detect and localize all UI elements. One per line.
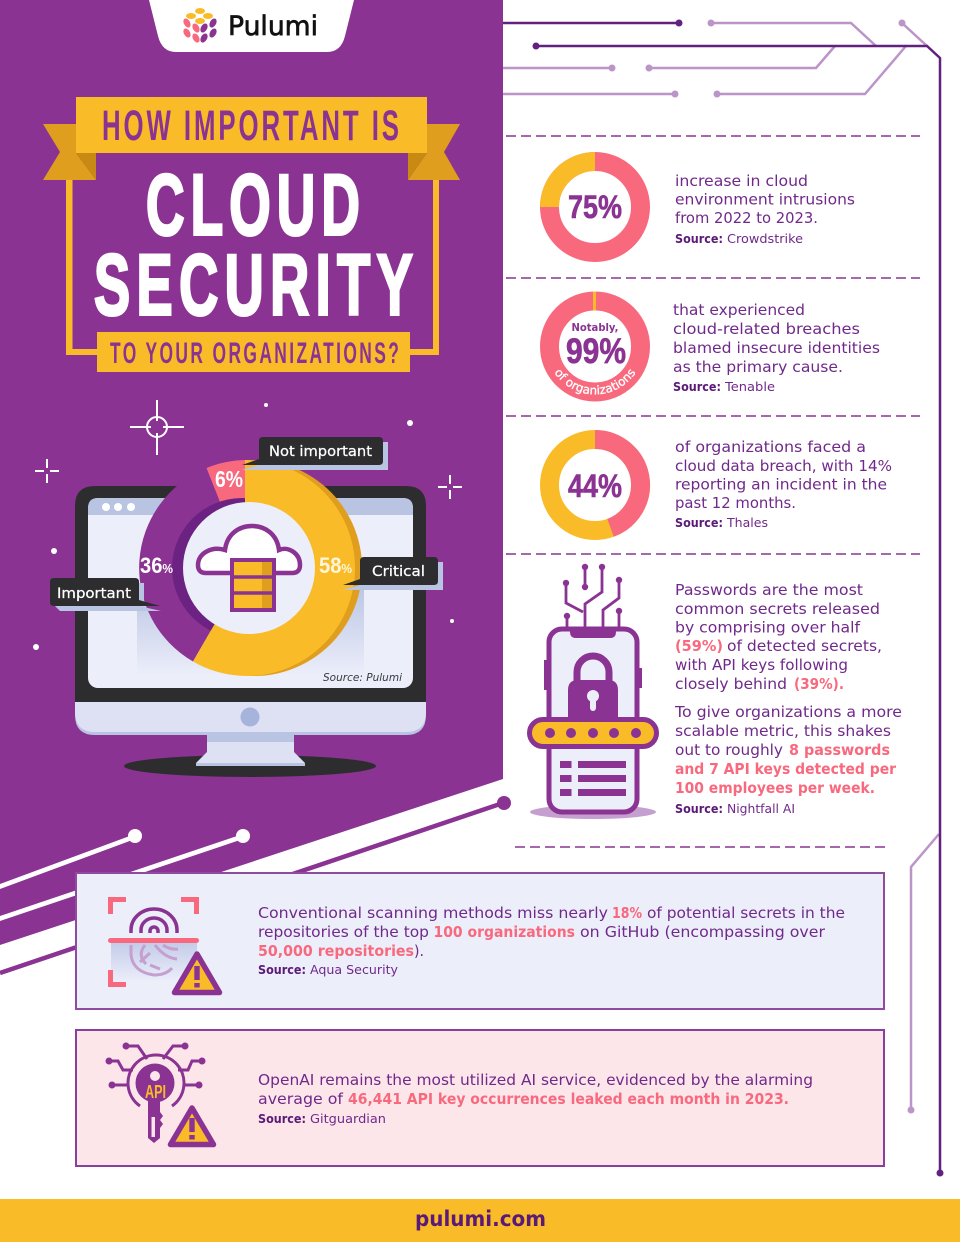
stat text: insecure identities: blamed insecure identities xyxy=(673,339,880,357)
logo: Pulumi xyxy=(228,11,318,42)
stat text: insecure identities: Source: xyxy=(673,379,721,394)
text: OpenAI API keys: 46,441 API key occurrences leaked each month in 2023. xyxy=(348,1090,789,1108)
stat text: passwords and API keys: 100 employees per week. xyxy=(675,779,875,797)
text: scanning methods: on GitHub (encompassing over xyxy=(580,923,826,941)
decorative sparkles and crosshair xyxy=(33,400,462,650)
callout: Critical xyxy=(343,557,443,590)
panel: purple title background xyxy=(0,0,503,945)
stat text: passwords and API keys: closely behind xyxy=(675,675,787,693)
callout: Important xyxy=(50,578,161,611)
stat: 99% donut: Notably, xyxy=(572,321,618,334)
stat text: passwords and API keys: 8 passwords xyxy=(789,741,890,759)
stat text: data breach: of organizations faced a xyxy=(675,438,866,456)
text: scanning methods: 18% xyxy=(612,904,642,922)
monitor illustration xyxy=(75,486,426,777)
title banner xyxy=(43,97,460,372)
icon: phone with padlock and circuits xyxy=(530,564,656,819)
text: scanning methods: repositories of the top xyxy=(258,923,429,941)
stat text: passwords and API keys: (39%). xyxy=(794,675,844,693)
text: OpenAI API keys: average of xyxy=(258,1090,344,1108)
stat text: cloud intrusions: increase in cloud xyxy=(675,172,808,190)
icon: API key with warning: API xyxy=(145,1082,166,1102)
stat text: insecure identities: that experienced xyxy=(673,301,805,319)
stat: 44% donut: 44% xyxy=(568,468,622,504)
text: scanning methods: 100 organizations xyxy=(434,923,575,941)
text: OpenAI API keys: Gitguardian xyxy=(310,1111,386,1126)
callout: Critical: Critical xyxy=(372,564,425,580)
monitor illustration: Source: Pulumi xyxy=(323,671,402,684)
stat: 99% donut: of organizations xyxy=(555,369,636,395)
text: OpenAI API keys: OpenAI remains the most utilized AI service, evidenced by the alarming xyxy=(258,1071,813,1089)
section dividers xyxy=(506,136,920,847)
stat text: passwords and API keys: To give organizations a more xyxy=(674,703,902,721)
callout: Not important xyxy=(242,437,388,470)
donut chart: importance of cloud security xyxy=(50,437,443,676)
stat text: data breach xyxy=(675,438,892,530)
icon: cloud with server xyxy=(198,526,300,610)
stat text: data breach: Source: xyxy=(675,515,723,530)
text: OpenAI API keys: Source: xyxy=(258,1111,306,1126)
stat text: passwords and API keys: with API keys following xyxy=(675,656,848,674)
stat text: passwords and API keys: by comprising over half xyxy=(675,618,861,636)
stat: 75% donut xyxy=(550,162,640,252)
stat text: passwords and API keys: out to roughly xyxy=(675,741,783,759)
circuit lines: lower left xyxy=(0,796,511,973)
stat text: cloud intrusions: Crowdstrike xyxy=(727,231,803,246)
logo xyxy=(149,0,354,52)
callout: Not important: Not important xyxy=(269,444,373,460)
title banner: HOW IMPORTANT IS xyxy=(102,101,399,150)
stat text: passwords and API keys: and 7 API keys detected per xyxy=(675,760,897,778)
stat text: cloud intrusions: environment intrusions xyxy=(675,190,855,208)
stat text: data breach: reporting an incident in the xyxy=(675,476,887,494)
stat text: passwords and API keys xyxy=(674,581,902,816)
label: 58%: 58% xyxy=(319,553,352,578)
text: scanning methods: Source: xyxy=(258,962,306,977)
stat: 75% donut: 75% xyxy=(568,189,622,225)
stat: 44% donut xyxy=(550,439,641,530)
stat text: cloud intrusions: from 2022 to 2023. xyxy=(675,209,818,227)
text: scanning methods: of potential secrets in the xyxy=(647,904,845,922)
text: scanning methods: Conventional scanning methods miss nearly xyxy=(258,904,608,922)
title banner: SECURITY xyxy=(94,238,413,334)
stat text: passwords and API keys: of detected secrets, xyxy=(727,637,882,655)
stat: 99% donut: 99% xyxy=(566,332,626,371)
stat text: passwords and API keys: Nightfall AI xyxy=(727,801,795,816)
stat text: data breach: cloud data breach, with 14% xyxy=(675,457,892,475)
callout: Important: Important xyxy=(57,586,132,602)
panel: scanning methods xyxy=(76,873,884,1009)
stat text: passwords and API keys: Source: xyxy=(675,801,723,816)
footer: pulumi.com xyxy=(415,1207,546,1231)
stat text: passwords and API keys: (59%) xyxy=(675,637,723,655)
label: 6%: 6% xyxy=(215,466,243,492)
stat text: data breach: Thales xyxy=(726,515,768,530)
stat text: cloud intrusions xyxy=(675,172,855,246)
stat text: insecure identities: cloud-related breaches xyxy=(673,320,860,338)
footer xyxy=(0,1199,960,1242)
stat text: data breach: past 12 months. xyxy=(675,494,796,512)
text: OpenAI API keys xyxy=(258,1071,813,1126)
stat text: passwords and API keys: common secrets released xyxy=(675,600,880,618)
stat: 99% donut xyxy=(540,292,650,402)
text: scanning methods: Aqua Security xyxy=(310,962,399,977)
title banner: CLOUD xyxy=(146,158,360,254)
icon: fingerprint scan with warning xyxy=(108,900,220,992)
text: scanning methods xyxy=(258,904,845,977)
panel: OpenAI API keys xyxy=(76,1030,884,1166)
title banner: TO YOUR ORGANIZATIONS? xyxy=(110,337,399,370)
icon: API key with warning xyxy=(106,1042,214,1144)
stat text: insecure identities: as the primary cause. xyxy=(673,358,843,376)
stat text: passwords and API keys: scalable metric, this shakes xyxy=(675,722,891,740)
stat text: insecure identities: Tenable xyxy=(724,379,775,394)
text: scanning methods: ). xyxy=(414,942,424,960)
stat text: insecure identities xyxy=(673,301,880,394)
stat text: cloud intrusions: Source: xyxy=(675,231,723,246)
label: 36%: 36% xyxy=(140,553,173,578)
circuit lines: top right xyxy=(503,20,944,1176)
stat text: passwords and API keys: Passwords are the most xyxy=(675,581,863,599)
text: scanning methods: 50,000 repositories xyxy=(258,942,414,960)
